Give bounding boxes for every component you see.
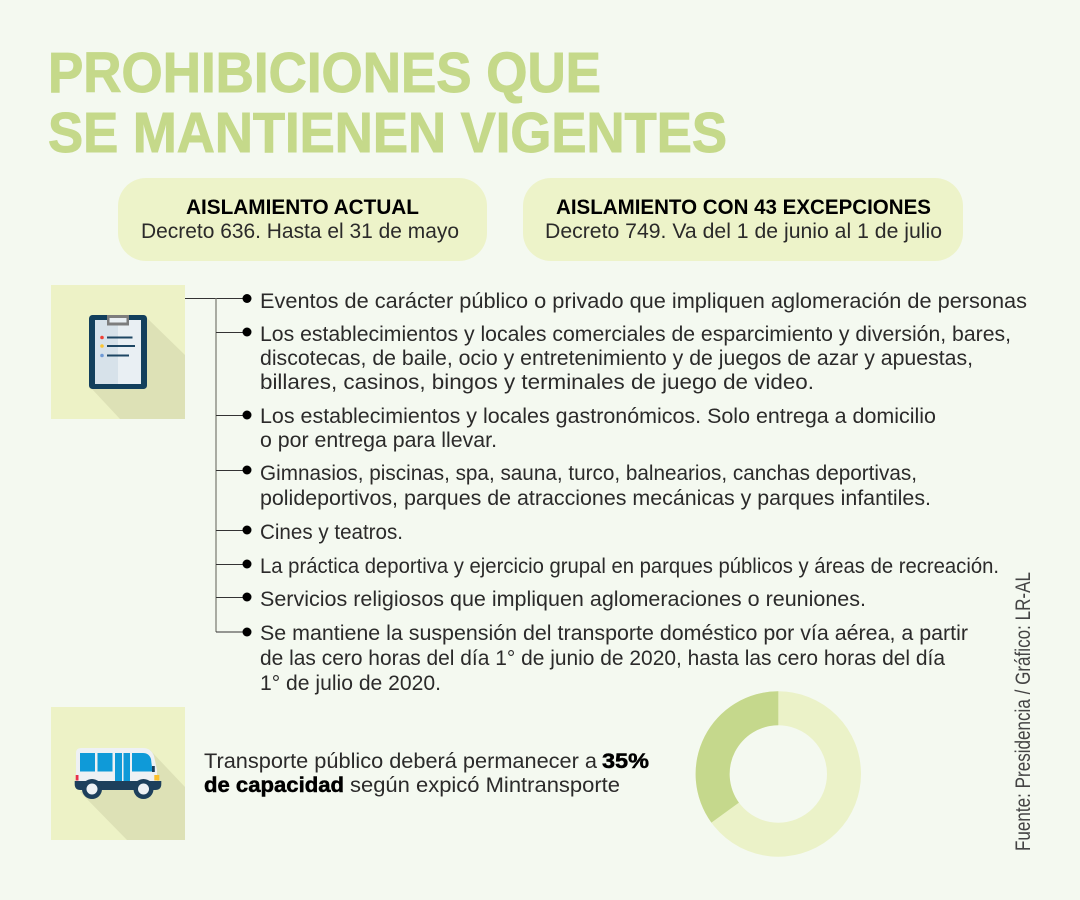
donut chart: 35% [696,691,844,840]
text block: list of prohibitions: Servicios religiosos que impliquen aglomeraciones o reuniones. [260,587,866,611]
connector tree [185,294,252,636]
icon: bus [51,707,185,840]
text block: list of prohibitions: polideportivos, parques de atracciones mecánicas y parques infantiles. [260,486,931,510]
icon: clipboard [51,285,185,419]
text block: list of prohibitions: Cines y teatros. [260,520,403,544]
text block: list of prohibitions: Se mantiene la suspensión del transporte doméstico por vía aérea, a partir [260,621,968,645]
panel: aislamiento con 43 excepciones: AISLAMIENTO CON 43 EXCEPCIONES [556,195,931,219]
panel: aislamiento actual [118,178,487,261]
text block: transporte público: Transporte público deberá permanecer a [204,749,597,773]
text block: list of prohibitions: Los establecimientos y locales comerciales de esparcimiento y diversión, bares, [260,322,1011,346]
text block: list of prohibitions: o por entrega para llevar. [260,428,497,452]
title: SE MANTIENEN VIGENTES [48,101,727,165]
text block: list of prohibitions: billares, casinos, bingos y terminales de juego de video. [260,370,814,394]
text block: transporte público: según expicó Mintransporte [350,773,620,797]
text block: list of prohibitions: Eventos de carácter público o privado que impliquen aglomeración de personas [260,289,1027,313]
panel: aislamiento actual: AISLAMIENTO ACTUAL [186,195,419,219]
text block: transporte público [204,749,649,797]
source credit: Fuente: Presidencia / Gráfico: LR-AL [1012,572,1035,851]
text block: transporte público: de capacidad [204,773,344,797]
text block: list of prohibitions: discotecas, de baile, ocio y entretenimiento y de juegos de azar y apuestas, [260,346,973,370]
text block: list of prohibitions: Los establecimientos y locales gastronómicos. Solo entrega a domicilio [260,404,936,428]
text block: list of prohibitions: 1° de julio de 2020. [260,671,441,695]
title [48,41,727,165]
title: PROHIBICIONES QUE [48,41,601,105]
text block: list of prohibitions [260,289,1027,695]
panel: aislamiento con 43 excepciones: Decreto 749. Va del 1 de junio al 1 de julio [545,219,942,243]
text block: transporte público: 35% [602,749,649,773]
panel: aislamiento con 43 excepciones [523,178,963,261]
text block: list of prohibitions: La práctica deportiva y ejercicio grupal en parques públicos y áreas de recreación. [260,554,999,578]
text block: list of prohibitions: de las cero horas del día 1° de junio de 2020, hasta las cero horas del día [260,646,945,670]
panel: aislamiento actual: Decreto 636. Hasta el 31 de mayo [141,219,459,243]
text block: list of prohibitions: Gimnasios, piscinas, spa, sauna, turco, balnearios, canchas deportivas, [260,461,917,485]
